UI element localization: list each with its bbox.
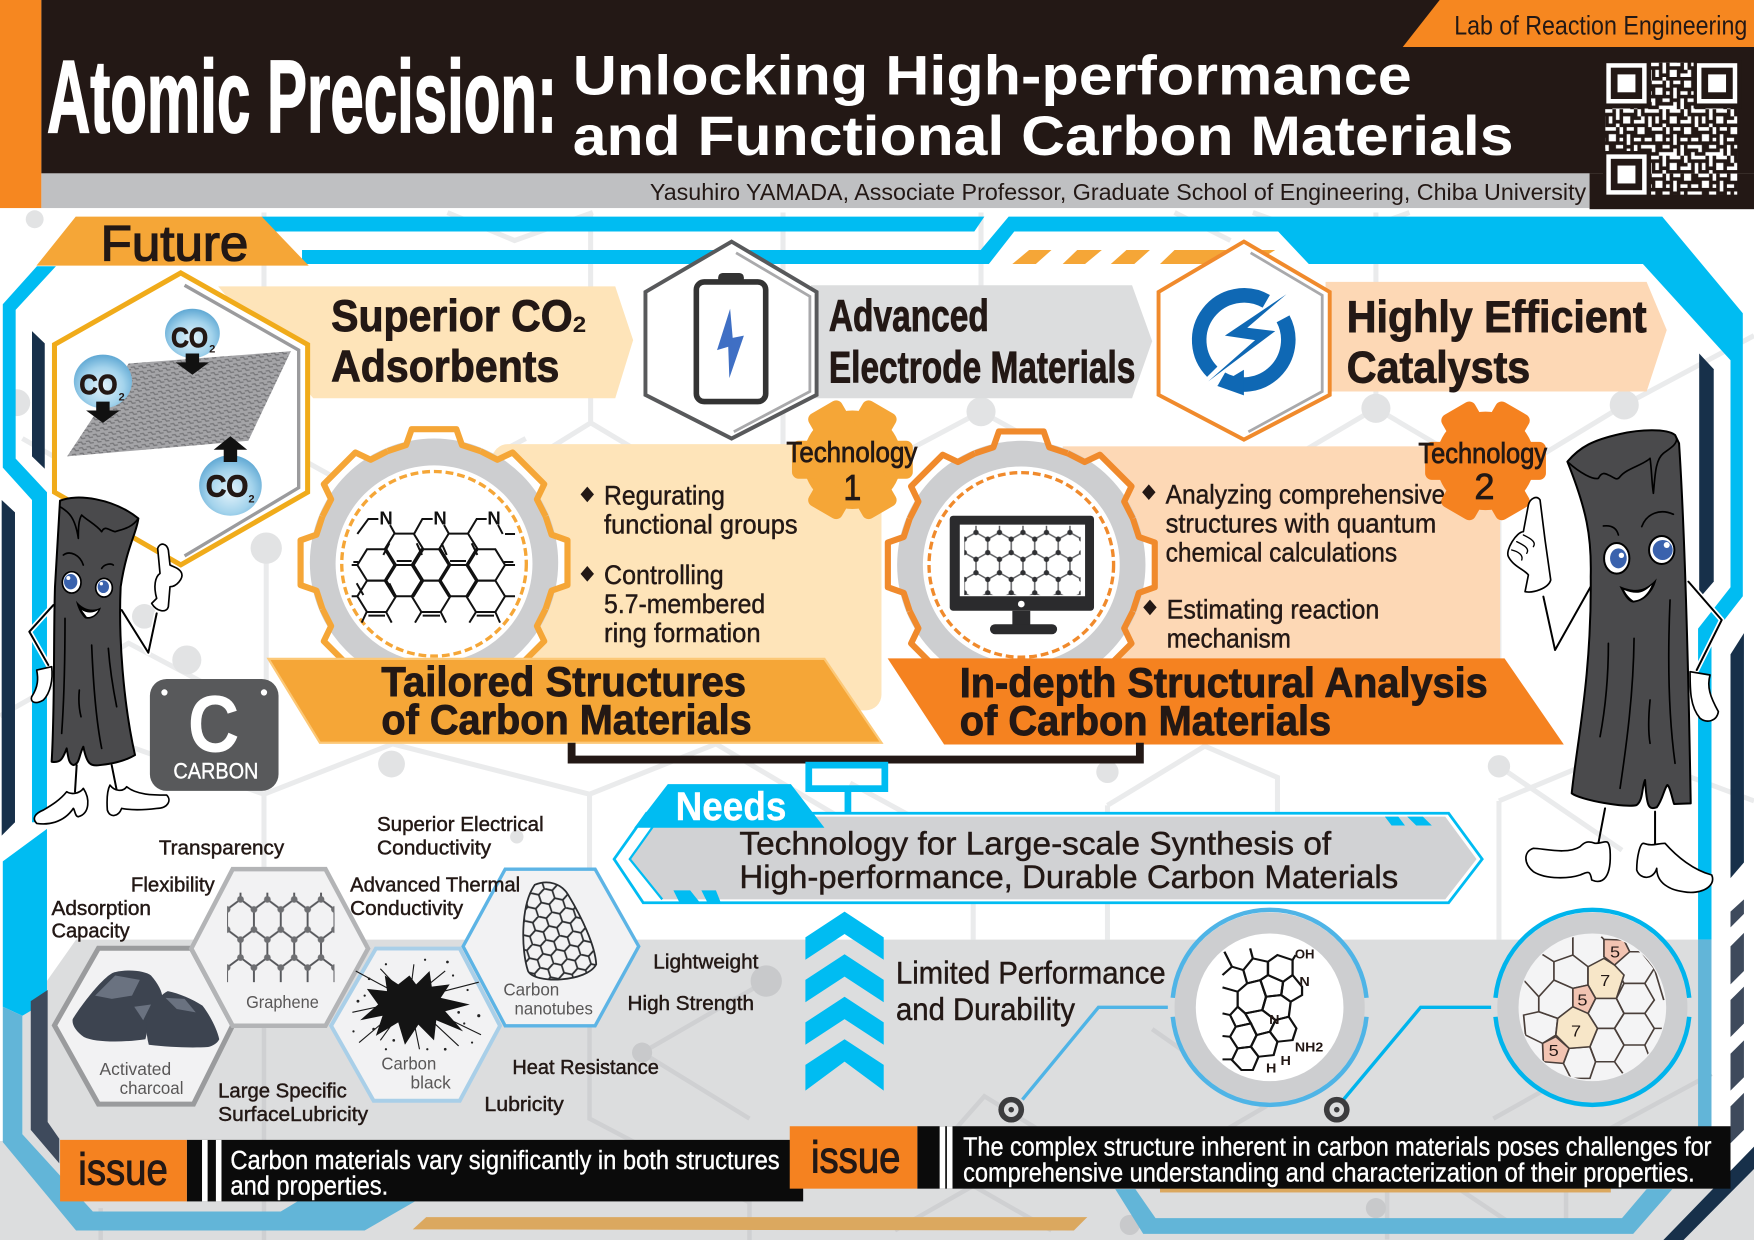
property labels: Advanced Thermal <box>350 875 520 897</box>
CO2 bubble bottom: 2 <box>248 493 255 505</box>
limited performance text: and Durability <box>896 992 1075 1027</box>
property labels: SurfaceLubricity <box>218 1104 369 1126</box>
CO2 bubble left: 2 <box>119 391 125 403</box>
property labels: Large Specific <box>218 1080 347 1102</box>
badge: technology 2: 2 <box>1474 467 1494 507</box>
circle: functional group molecule: OH <box>1295 947 1315 961</box>
property labels <box>51 814 759 1126</box>
property labels: Superior Electrical <box>377 814 544 836</box>
property labels: Lubricity <box>484 1094 565 1116</box>
CO2 bubble bottom: CO <box>206 471 248 504</box>
badge: technology 1: 1 <box>843 468 861 508</box>
circle: 5-7 membered rings: 5 <box>1577 991 1588 1009</box>
CO2 bubble top <box>165 309 220 375</box>
hexagon: carbon nanotubes: nanotubes <box>515 999 593 1019</box>
circle: functional group molecule <box>1173 910 1367 1105</box>
arrow: Highly Efficient Catalysts: Catalysts <box>1347 343 1530 393</box>
panel: technology 1 <box>492 444 881 710</box>
bullet list 1: 5.7-membered <box>604 589 765 619</box>
issue bar left: Carbon materials vary significantly in both structures <box>230 1147 780 1175</box>
bullet list 2: mechanism <box>1167 624 1291 654</box>
molecule with nitrogen groups: N <box>433 508 447 529</box>
hexagon: carbon nanotubes: Carbon <box>503 980 559 1000</box>
CO2 bubble left: CO <box>79 369 117 400</box>
needs text <box>739 826 1398 895</box>
arrow: Superior CO2 Adsorbents: Adsorbents <box>331 341 559 391</box>
circle: functional group molecule: H <box>1280 1054 1291 1068</box>
property labels: Capacity <box>51 920 131 942</box>
character: left mascot <box>29 498 182 824</box>
banner: in-depth analysis: of Carbon Materials <box>960 698 1331 744</box>
bullet list 1: Controlling <box>604 560 724 590</box>
badge: technology 2 <box>1418 399 1547 523</box>
QR code <box>1603 60 1742 197</box>
circle: functional group molecule: H <box>1266 1062 1276 1076</box>
connector to needs <box>809 765 885 817</box>
CO2 bubble bottom <box>199 436 262 516</box>
banner: in-depth analysis <box>888 658 1564 745</box>
title: Unlocking High-performance and Functional Carbon Materials <box>573 44 1513 167</box>
needs tab: Needs <box>676 784 786 829</box>
blue frame: left and bottom <box>2 250 1672 1234</box>
banner: tailored structures <box>268 659 881 743</box>
hexagon: battery icon <box>645 242 817 439</box>
circle: functional group molecule: N <box>1299 975 1310 989</box>
property labels: Heat Resistance <box>512 1057 659 1079</box>
pointer line 1 <box>998 1007 1168 1123</box>
banner: in-depth analysis: In-depth Structural Analysis <box>960 660 1488 706</box>
bullet list 2: structures with quantum <box>1166 508 1436 538</box>
bullet list 2: chemical calculations <box>1166 538 1397 568</box>
hexagon: graphene <box>191 869 368 1026</box>
property labels: High Strength <box>628 993 754 1015</box>
Future tab <box>36 215 309 272</box>
arrow: Advanced Electrode Materials <box>811 285 1152 398</box>
Future tab: Future <box>101 215 248 272</box>
molecule with nitrogen groups <box>352 508 515 623</box>
needs text: Technology for Large-scale Synthesis of <box>739 826 1332 862</box>
arrow: Highly Efficient Catalysts <box>1326 282 1667 393</box>
limited performance text: Limited Performance <box>896 955 1166 990</box>
arrow: Advanced Electrode Materials: Advanced <box>829 291 989 341</box>
hexagon: carbon black <box>331 949 500 1101</box>
banner: tailored structures: of Carbon Materials <box>381 697 752 743</box>
connector bracket <box>572 743 1140 760</box>
issue bar left: and properties. <box>230 1173 388 1201</box>
property labels: Conductivity <box>350 898 464 920</box>
CO2 bubble top: CO <box>171 322 208 353</box>
CO2 bubble top: 2 <box>209 343 215 355</box>
arrow: Highly Efficient Catalysts: Highly Efficient <box>1347 292 1647 342</box>
chevron arrows <box>805 912 884 1091</box>
bullet list 1 <box>581 481 798 648</box>
hexagon: activated charcoal: charcoal <box>120 1078 183 1098</box>
limited performance text <box>896 955 1166 1027</box>
issue bar left <box>60 1140 803 1201</box>
needs tab <box>634 784 824 829</box>
title: Atomic Precision: Atomic Precision: <box>47 39 557 154</box>
property labels: Flexibility <box>131 875 216 897</box>
bullet list 2: Analyzing comprehensive <box>1166 479 1445 509</box>
molecule with nitrogen groups: N <box>379 508 393 529</box>
hexagon: catalyst icon <box>1159 242 1330 440</box>
property labels: Conductivity <box>377 838 492 860</box>
issue bar right <box>790 1126 1731 1189</box>
bullet list 1: functional groups <box>604 510 798 540</box>
author line: Yasuhiro YAMADA, Associate Professor, Graduate School of Engineering, Chiba University <box>650 179 1586 205</box>
panel: technology 2 <box>1063 446 1500 661</box>
badge: technology 1 <box>786 398 918 522</box>
circle: functional group molecule: NH2 <box>1295 1041 1323 1055</box>
molecule with nitrogen groups: N <box>487 508 501 529</box>
banner: tailored structures: Tailored Structures <box>381 659 746 705</box>
bullet list 1: ring formation <box>604 618 761 648</box>
arrow: Superior CO2 Adsorbents <box>218 286 633 398</box>
carbon element tile <box>150 679 279 791</box>
title: Unlocking High-performance and Functional Carbon Materials: Unlocking High-performance <box>573 44 1412 107</box>
carbon element tile: C <box>188 680 239 770</box>
needs panel <box>614 784 1482 903</box>
property labels: Transparency <box>159 838 285 860</box>
circle: functional group molecule: N <box>1269 1013 1279 1027</box>
graphene sheet <box>67 351 291 456</box>
bullet list 2: Estimating reaction <box>1167 595 1379 625</box>
bullet list 1: Regurating <box>604 481 725 511</box>
circle: 5-7 membered rings: 7 <box>1600 972 1610 990</box>
issue bar right: issue <box>811 1132 900 1182</box>
property labels: Adsorption <box>51 898 151 920</box>
hexagon: CO2 adsorption <box>54 273 308 565</box>
hexagon: activated charcoal: Activated <box>100 1059 171 1079</box>
gear: computational analysis monitor <box>888 431 1155 698</box>
gear: nitrogen-doped structure <box>301 429 567 696</box>
issue bar right: comprehensive understanding and characterization of their properties. <box>963 1159 1695 1187</box>
pointer line 2 <box>1324 1007 1491 1123</box>
property labels: Lightweight <box>653 952 759 974</box>
circle: 5-7 membered rings: 5 <box>1549 1042 1559 1060</box>
bullet list 2 <box>1142 479 1445 654</box>
arrow: Advanced Electrode Materials: Electrode Materials <box>829 343 1135 393</box>
needs text: High-performance, Durable Carbon Materials <box>739 859 1398 895</box>
arrow: Superior CO2 Adsorbents: 2 <box>573 312 586 337</box>
hexagon: carbon black: Carbon <box>381 1053 436 1073</box>
hexagon: activated charcoal <box>54 948 233 1104</box>
grey lower band <box>0 940 1754 1240</box>
carbon element tile: CARBON <box>173 759 258 784</box>
blue frame: top and right <box>262 217 1754 1240</box>
circle: 5-7 membered rings <box>1495 910 1689 1105</box>
hexagon: carbon nanotubes <box>463 869 639 1026</box>
hexagon: carbon black: black <box>411 1072 451 1092</box>
arrow: Superior CO2 Adsorbents: Superior CO <box>331 291 573 341</box>
circle: 5-7 membered rings: 5 <box>1610 943 1620 961</box>
lab tab <box>1403 0 1754 47</box>
hexagon: graphene: Graphene <box>246 992 319 1012</box>
circle: 5-7 membered rings: 7 <box>1571 1023 1581 1040</box>
badge: technology 1: Technology <box>786 437 918 469</box>
monitor icon <box>950 516 1094 634</box>
CO2 bubble left <box>74 355 132 423</box>
header <box>0 0 1754 209</box>
badge: technology 2: Technology <box>1418 438 1547 470</box>
character: right mascot <box>1508 430 1722 892</box>
title: Unlocking High-performance and Functional Carbon Materials: and Functional Carbon Materials <box>573 104 1513 167</box>
issue bar left: issue <box>78 1145 168 1195</box>
